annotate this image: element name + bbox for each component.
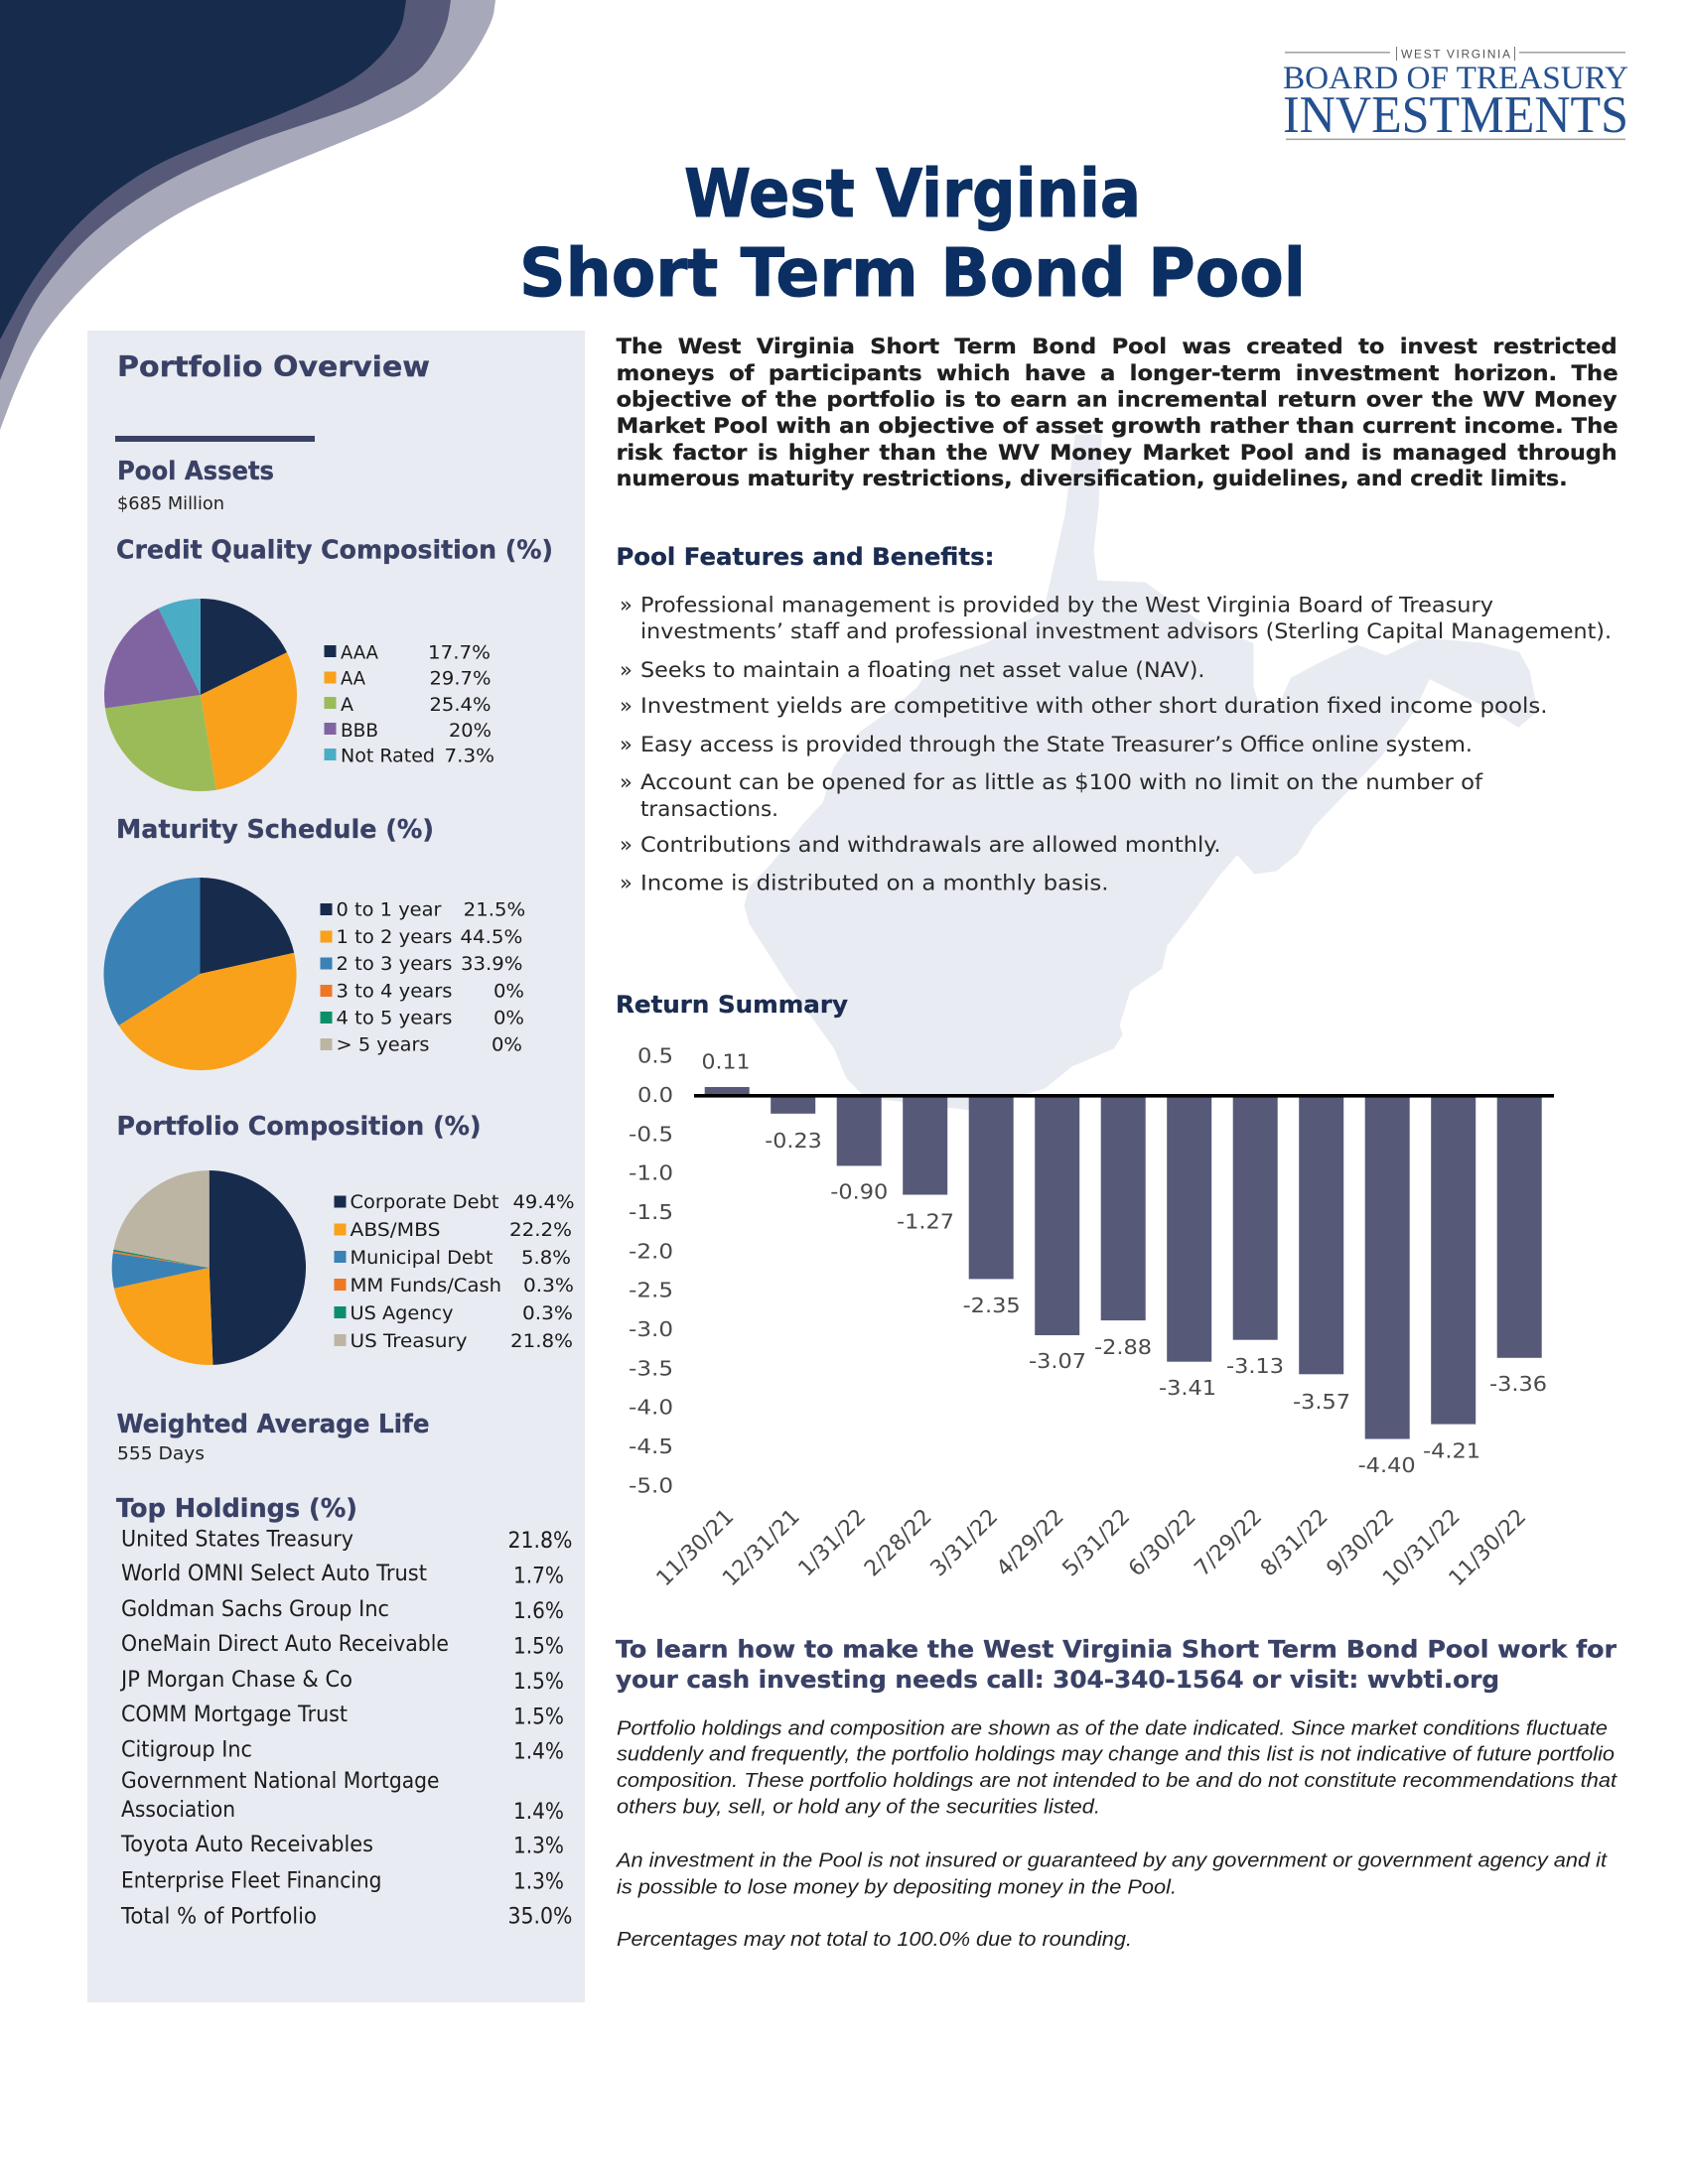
bullet list: pool features: Professional management is provided by the West Virginia Board of Treasury [640,594,1493,617]
pool assets: Pool Assets [117,457,274,486]
legend: credit quality: Not Rated [341,745,435,766]
legend: credit quality: 29.7% [429,668,491,690]
bullet list: pool features: » [620,658,633,682]
bullet list: pool features [620,594,1612,895]
table: top holdings: COMM Mortgage Trust [121,1703,348,1727]
x axis date labels: 9/30/22 [1323,1505,1399,1581]
y axis labels: -4.5 [629,1434,673,1458]
title: West Virginia [684,155,1141,232]
pie chart: portfolio composition [112,1170,306,1365]
x axis date labels: 7/29/22 [1191,1505,1267,1581]
logo: West Virginia Board of Treasury Investments [1283,47,1628,144]
legend: portfolio composition: 5.8% [521,1247,571,1269]
data labels: -3.57 [1293,1390,1350,1414]
data labels: -3.41 [1159,1376,1216,1400]
legend: portfolio composition [334,1191,574,1352]
legend: portfolio composition: Municipal Debt [350,1247,492,1269]
logo: West Virginia Board of Treasury Investments: INVESTMENTS [1283,86,1628,144]
bullet list: pool features: Investment yields are competitive with other short duration fixed income pools. [640,694,1547,718]
table: top holdings: Association [121,1798,235,1823]
bullet list: pool features: » [620,770,633,794]
legend: portfolio composition: ABS/MBS [350,1219,441,1241]
x axis date labels: 4/29/22 [992,1505,1069,1581]
legend: maturity schedule: > 5 years [336,1034,429,1056]
legend: maturity schedule: 0% [493,1007,524,1028]
x axis date labels: 3/31/22 [926,1505,1003,1581]
y axis labels [629,1044,673,1497]
title [519,155,1306,312]
y axis labels: -0.5 [629,1122,673,1146]
bullet list: pool features: Contributions and withdrawals are allowed monthly. [640,833,1221,857]
table: top holdings: United States Treasury [121,1527,353,1553]
disclaimer text: composition. These portfolio holdings are not intended to be and do not constitute recommendations that [617,1769,1618,1792]
panel: portfolio overview [87,331,585,2002]
legend: credit quality: A [341,694,353,716]
logo: West Virginia Board of Treasury Investments: BOARD OF TREASURY [1283,61,1628,96]
legend: portfolio composition: 21.8% [510,1330,573,1352]
intro paragraph: The West Virginia Short Term Bond Pool was created to invest restricted [617,335,1618,358]
bullet list: pool features: Income is distributed on a monthly basis. [640,872,1108,895]
table: top holdings: 35.0% [508,1904,572,1930]
table: top holdings: Government National Mortgage [121,1769,439,1794]
table: top holdings: 1.6% [513,1599,564,1624]
data labels: -3.07 [1029,1349,1086,1373]
legend: maturity schedule: 21.5% [464,898,525,920]
table: top holdings: OneMain Direct Auto Receivable [121,1632,449,1657]
disclaimer text: is possible to lose money by depositing money in the Pool. [617,1875,1177,1898]
legend: maturity schedule: 33.9% [461,953,522,975]
legend: portfolio composition: Corporate Debt [350,1191,498,1213]
legend: portfolio composition: 49.4% [512,1191,574,1213]
heading: portfolio composition: Portfolio Composition (%) [117,1112,481,1142]
table: top holdings: 1.5% [513,1670,564,1695]
data labels: -3.13 [1226,1354,1284,1378]
header swoosh [0,0,495,430]
y axis labels: -2.5 [629,1279,673,1302]
bullet list: pool features: Account can be opened for as little as $100 with no limit on the number of [640,770,1483,794]
legend: portfolio composition: US Agency [350,1302,453,1324]
bullet list: pool features: Seeks to maintain a floating net asset value (NAV). [640,658,1205,682]
intro paragraph: numerous maturity restrictions, diversification, guidelines, and credit limits. [617,467,1568,490]
table: top holdings: 1.4% [513,1800,564,1825]
data labels: -4.40 [1358,1453,1416,1477]
y axis labels: -1.5 [629,1200,673,1224]
bullet list: pool features: » [620,694,633,718]
table: top holdings [119,1527,573,1930]
intro paragraph: risk factor is higher than the WV Money Market Pool and is managed through [617,441,1618,465]
disclaimer text: Percentages may not total to 100.0% due to rounding. [617,1928,1132,1951]
x axis date labels: 8/31/22 [1256,1505,1334,1581]
x axis date labels: 11/30/22 [1445,1505,1531,1591]
bullet list: pool features: » [620,872,633,895]
data labels: -3.36 [1489,1372,1547,1396]
heading: top holdings: Top Holdings (%) [116,1494,357,1524]
weighted average life: Weighted Average Life [117,1410,429,1439]
legend: credit quality: 25.4% [429,694,491,716]
pool assets: $685 Million [117,493,224,514]
intro paragraph: moneys of participants which have a longer-term investment horizon. The [617,361,1618,385]
x axis date labels: 2/28/22 [860,1505,937,1581]
table: top holdings: 1.4% [513,1739,564,1765]
y axis labels: -3.0 [629,1317,673,1341]
data labels: -2.88 [1094,1335,1152,1359]
table: top holdings: Total % of Portfolio [120,1904,317,1930]
legend: portfolio composition: US Treasury [350,1330,467,1352]
y axis labels: -1.0 [629,1161,673,1185]
disclaimer text: suddenly and frequently, the portfolio holdings may change and this list is not indicative of future portfolio [617,1742,1615,1765]
table: top holdings: 1.5% [513,1634,564,1660]
legend: credit quality: 20% [449,720,492,742]
disclaimer text: others buy, sell, or hold any of the securities listed. [617,1796,1100,1819]
x axis date labels: 12/31/21 [718,1505,805,1591]
call to action: your cash investing needs call: 304-340-1564 or visit: wvbti.org [616,1666,1499,1694]
legend: credit quality [324,642,494,766]
call to action [616,1636,1617,1694]
table: top holdings: Goldman Sachs Group Inc [121,1597,389,1622]
x axis date labels [652,1505,1531,1591]
legend: credit quality: 7.3% [445,745,494,766]
heading: portfolio overview: Portfolio Overview [117,350,430,383]
legend: maturity schedule: 0% [493,980,524,1002]
title: Short Term Bond Pool [519,234,1306,312]
table: top holdings: World OMNI Select Auto Trust [121,1562,427,1586]
table: top holdings: 21.8% [508,1529,572,1554]
heading: return summary: Return Summary [616,991,848,1019]
y axis labels: -5.0 [629,1473,673,1497]
zero axis line [694,1094,1554,1098]
legend: maturity schedule [320,898,525,1056]
x axis date labels: 5/31/22 [1058,1505,1135,1581]
x axis date labels: 6/30/22 [1124,1505,1201,1581]
legend: credit quality: 17.7% [428,642,491,664]
table: top holdings: Enterprise Fleet Financing [121,1868,381,1894]
bullet list: pool features: » [620,733,633,756]
y axis labels: -4.0 [629,1396,673,1420]
pie chart: maturity schedule [103,878,297,1070]
bar chart: return summary [629,1044,1554,1591]
legend: maturity schedule: 0% [492,1034,522,1056]
legend: maturity schedule: 0 to 1 year [336,898,442,920]
table: top holdings: 1.7% [513,1565,564,1588]
data labels: -1.27 [897,1209,954,1233]
data labels [701,1050,1547,1477]
data labels: -4.21 [1423,1439,1480,1463]
legend: maturity schedule: 4 to 5 years [336,1007,453,1028]
table: top holdings: Toyota Auto Receivables [120,1833,373,1857]
y axis labels: 0.0 [637,1083,673,1107]
pool assets [117,457,274,514]
legend: portfolio composition: 0.3% [522,1302,573,1324]
x axis date labels: 11/30/21 [652,1505,739,1591]
heading: maturity schedule: Maturity Schedule (%) [116,815,434,845]
weighted average life [117,1410,429,1464]
weighted average life: 555 Days [117,1443,205,1464]
disclaimer text [615,1717,1618,1951]
data labels: -0.90 [830,1179,888,1203]
bullet list: pool features: » [620,594,633,617]
table: top holdings: 1.3% [513,1870,564,1894]
call to action: To learn how to make the West Virginia Short Term Bond Pool work for [616,1636,1617,1664]
heading: pool features and benefits: Pool Features and Benefits: [616,543,994,571]
legend: portfolio composition: 22.2% [509,1219,572,1241]
bullet list: pool features: transactions. [640,797,778,821]
data labels: 0.11 [701,1050,751,1074]
disclaimer text: Portfolio holdings and composition are shown as of the date indicated. Since market conditions fluctuate [617,1717,1608,1739]
watermark: West Virginia state outline [746,436,1536,1109]
x axis date labels: 1/31/22 [794,1505,871,1581]
legend: maturity schedule: 2 to 3 years [336,953,453,975]
legend: credit quality: BBB [341,720,378,742]
legend: maturity schedule: 44.5% [460,926,522,948]
pie chart: credit quality [104,599,297,791]
bullet list: pool features: Easy access is provided through the State Treasurer’s Office online system. [640,733,1473,756]
table: top holdings: 1.5% [513,1706,564,1729]
legend: credit quality: AAA [341,642,378,664]
intro paragraph: Market Pool with an objective of asset growth rather than current income. The [617,414,1618,438]
intro paragraph [617,335,1618,490]
disclaimer text: An investment in the Pool is not insured or guaranteed by any government or government agency and it [615,1849,1608,1872]
table: top holdings: 1.3% [513,1835,564,1858]
logo: West Virginia Board of Treasury Investments: WEST VIRGINIA [1401,48,1510,62]
x axis date labels: 10/31/22 [1378,1505,1466,1591]
data labels: -2.35 [963,1294,1021,1317]
y axis labels: 0.5 [637,1044,673,1068]
heading: credit quality composition: Credit Quality Composition (%) [116,536,553,566]
legend: credit quality: AA [341,668,365,690]
heading rule [115,436,315,442]
bars [705,1087,1542,1439]
legend: portfolio composition: 0.3% [523,1275,574,1297]
bullet list: pool features: investments’ staff and professional investment advisors (Sterling Capital Management). [640,619,1612,643]
y axis labels: -2.0 [629,1239,673,1263]
legend: maturity schedule: 3 to 4 years [336,980,453,1002]
legend: maturity schedule: 1 to 2 years [336,926,453,948]
y axis labels: -3.5 [629,1356,673,1380]
table: top holdings: Citigroup Inc [121,1737,252,1763]
bullet list: pool features: » [620,833,633,857]
legend: portfolio composition: MM Funds/Cash [350,1275,501,1297]
table: top holdings: JP Morgan Chase & Co [119,1668,352,1693]
data labels: -0.23 [765,1129,822,1153]
intro paragraph: objective of the portfolio is to earn an incremental return over the WV Money [617,387,1618,411]
